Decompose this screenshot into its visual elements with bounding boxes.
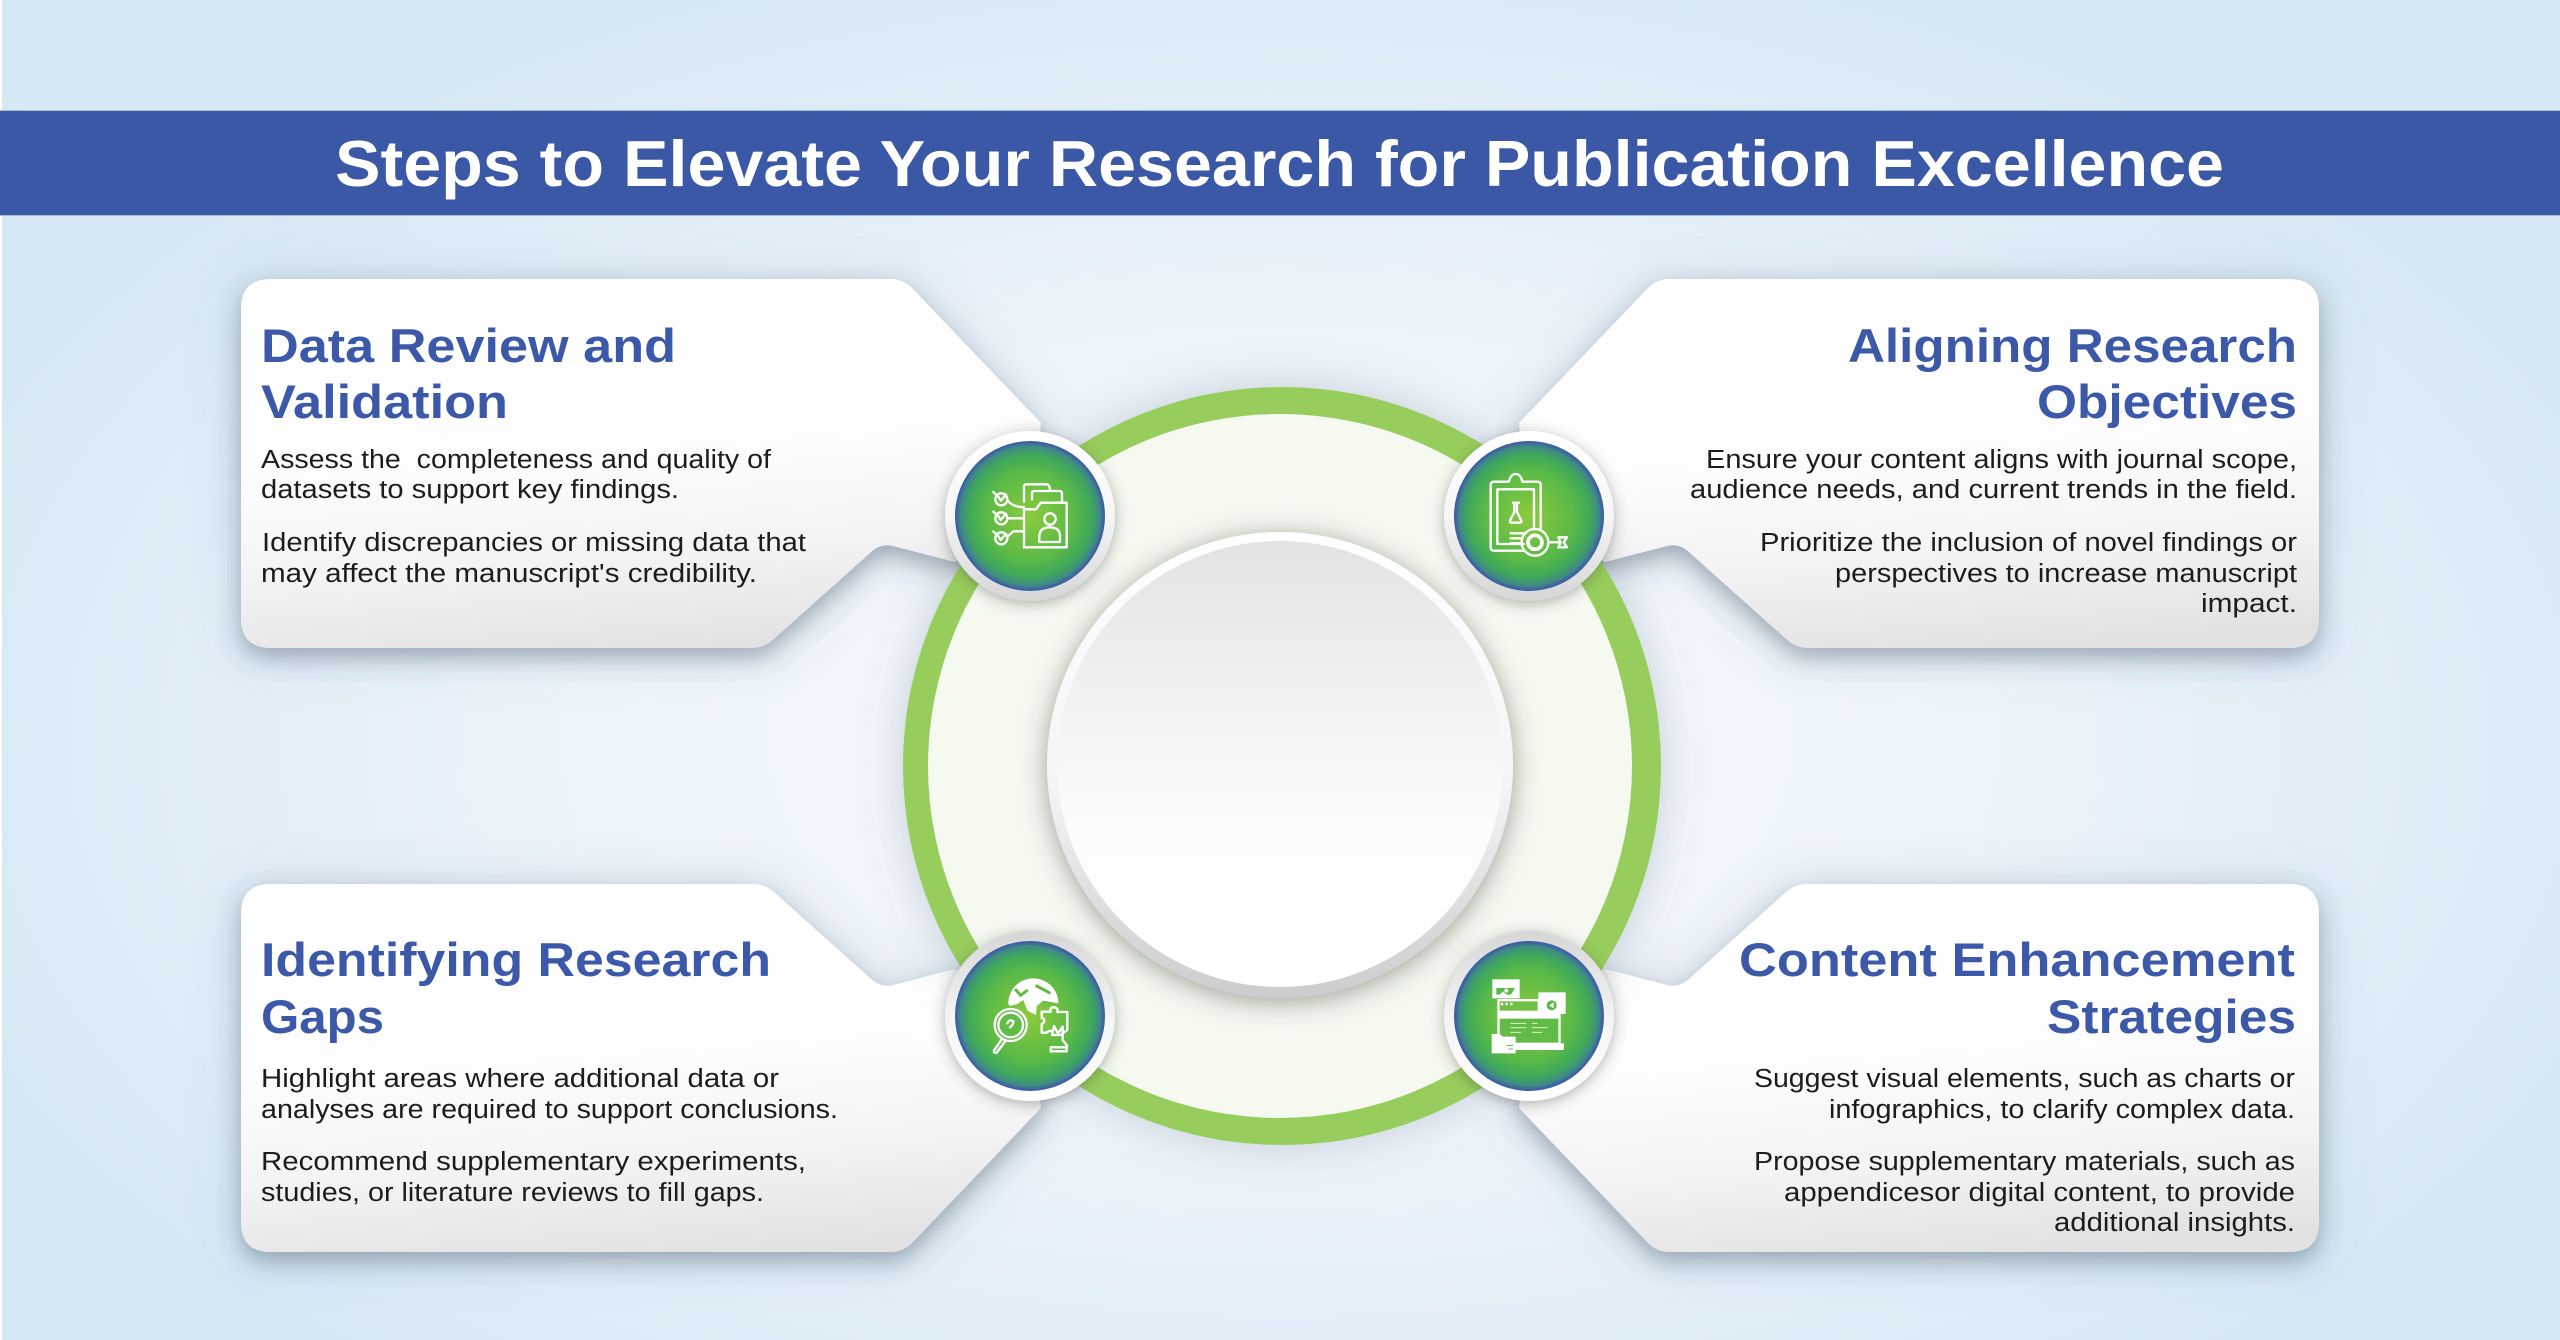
- center circle: [1047, 532, 1513, 998]
- body text: Content Enhancement Strategies: Propose supplementary materials, such as: [1754, 1148, 2295, 1176]
- body text: Aligning Research Objectives: Ensure your content aligns with journal scope,: [1706, 446, 2297, 474]
- body text: Identifying Research Gaps: [261, 1065, 838, 1207]
- heading: Content Enhancement Strategies: [1739, 933, 2296, 1043]
- body text: Data Review and Validation: datasets to support key findings.: [261, 476, 679, 504]
- node: Aligning Research Objectives: [1444, 431, 1614, 601]
- body text: Data Review and Validation: may affect the manuscript's credibility.: [261, 560, 757, 588]
- node: Data Review and Validation: [945, 431, 1115, 601]
- node: Content Enhancement Strategies: [1444, 931, 1614, 1101]
- body text: Identifying Research Gaps: studies, or literature reviews to fill gaps.: [261, 1179, 764, 1207]
- body text: Aligning Research Objectives: impact.: [2201, 590, 2297, 618]
- body text: Content Enhancement Strategies: additional insights.: [2054, 1209, 2295, 1237]
- body text: Data Review and Validation: [261, 446, 806, 588]
- heading: Aligning Research Objectives: [1848, 319, 2297, 428]
- heading: Data Review and Validation: [261, 319, 676, 428]
- green ring: [903, 387, 1661, 1145]
- icon: globe, magnifier and puzzle piece: [994, 978, 1067, 1053]
- body text: Content Enhancement Strategies: [1754, 1065, 2296, 1237]
- title banner: [0, 110, 2560, 216]
- title: Steps to Elevate Your Research for Publication Excellence: [335, 127, 2224, 200]
- heading: Data Review and Validation: Data Review and: [261, 319, 676, 372]
- heading: Identifying Research Gaps: Gaps: [261, 990, 384, 1043]
- body text: Data Review and Validation: Identify discrepancies or missing data that: [262, 529, 806, 557]
- body text: Content Enhancement Strategies: Suggest visual elements, such as charts or: [1754, 1065, 2296, 1093]
- icon: folders with checklist: [993, 484, 1067, 547]
- heading: Content Enhancement Strategies: Content Enhancement: [1739, 933, 2295, 986]
- icon: clipboard with flask and target: [1491, 474, 1567, 556]
- body text: Data Review and Validation: Assess the completeness and quality of: [261, 446, 772, 474]
- node: Identifying Research Gaps: [945, 931, 1115, 1101]
- panel: Aligning Research Objectives: [1519, 279, 2319, 648]
- body text: Aligning Research Objectives: Prioritize the inclusion of novel findings or: [1760, 529, 2298, 557]
- heading: Content Enhancement Strategies: Strategies: [2047, 990, 2296, 1043]
- icon: laptop with media windows: [1492, 979, 1566, 1053]
- body text: Identifying Research Gaps: Highlight areas where additional data or: [261, 1065, 780, 1093]
- body text: Identifying Research Gaps: analyses are required to support conclusions.: [261, 1096, 838, 1124]
- body text: Content Enhancement Strategies: infographics, to clarify complex data.: [1829, 1096, 2295, 1124]
- body text: Aligning Research Objectives: perspectives to increase manuscript: [1835, 560, 2297, 588]
- panel: Data Review and Validation: [241, 279, 1041, 648]
- heading: Aligning Research Objectives: Aligning Research: [1848, 319, 2297, 372]
- body text: Aligning Research Objectives: [1690, 446, 2298, 618]
- body text: Content Enhancement Strategies: appendicesor digital content, to provide: [1784, 1179, 2295, 1207]
- panel: Identifying Research Gaps: [241, 884, 1041, 1252]
- body text: Identifying Research Gaps: Recommend supplementary experiments,: [261, 1148, 806, 1176]
- heading: Identifying Research Gaps: [261, 933, 771, 1043]
- heading: Identifying Research Gaps: Identifying Research: [261, 933, 771, 986]
- body text: Aligning Research Objectives: audience needs, and current trends in the field.: [1690, 476, 2297, 504]
- panel: Content Enhancement Strategies: [1519, 884, 2319, 1252]
- heading: Data Review and Validation: Validation: [261, 375, 508, 428]
- heading: Aligning Research Objectives: Objectives: [2037, 375, 2297, 428]
